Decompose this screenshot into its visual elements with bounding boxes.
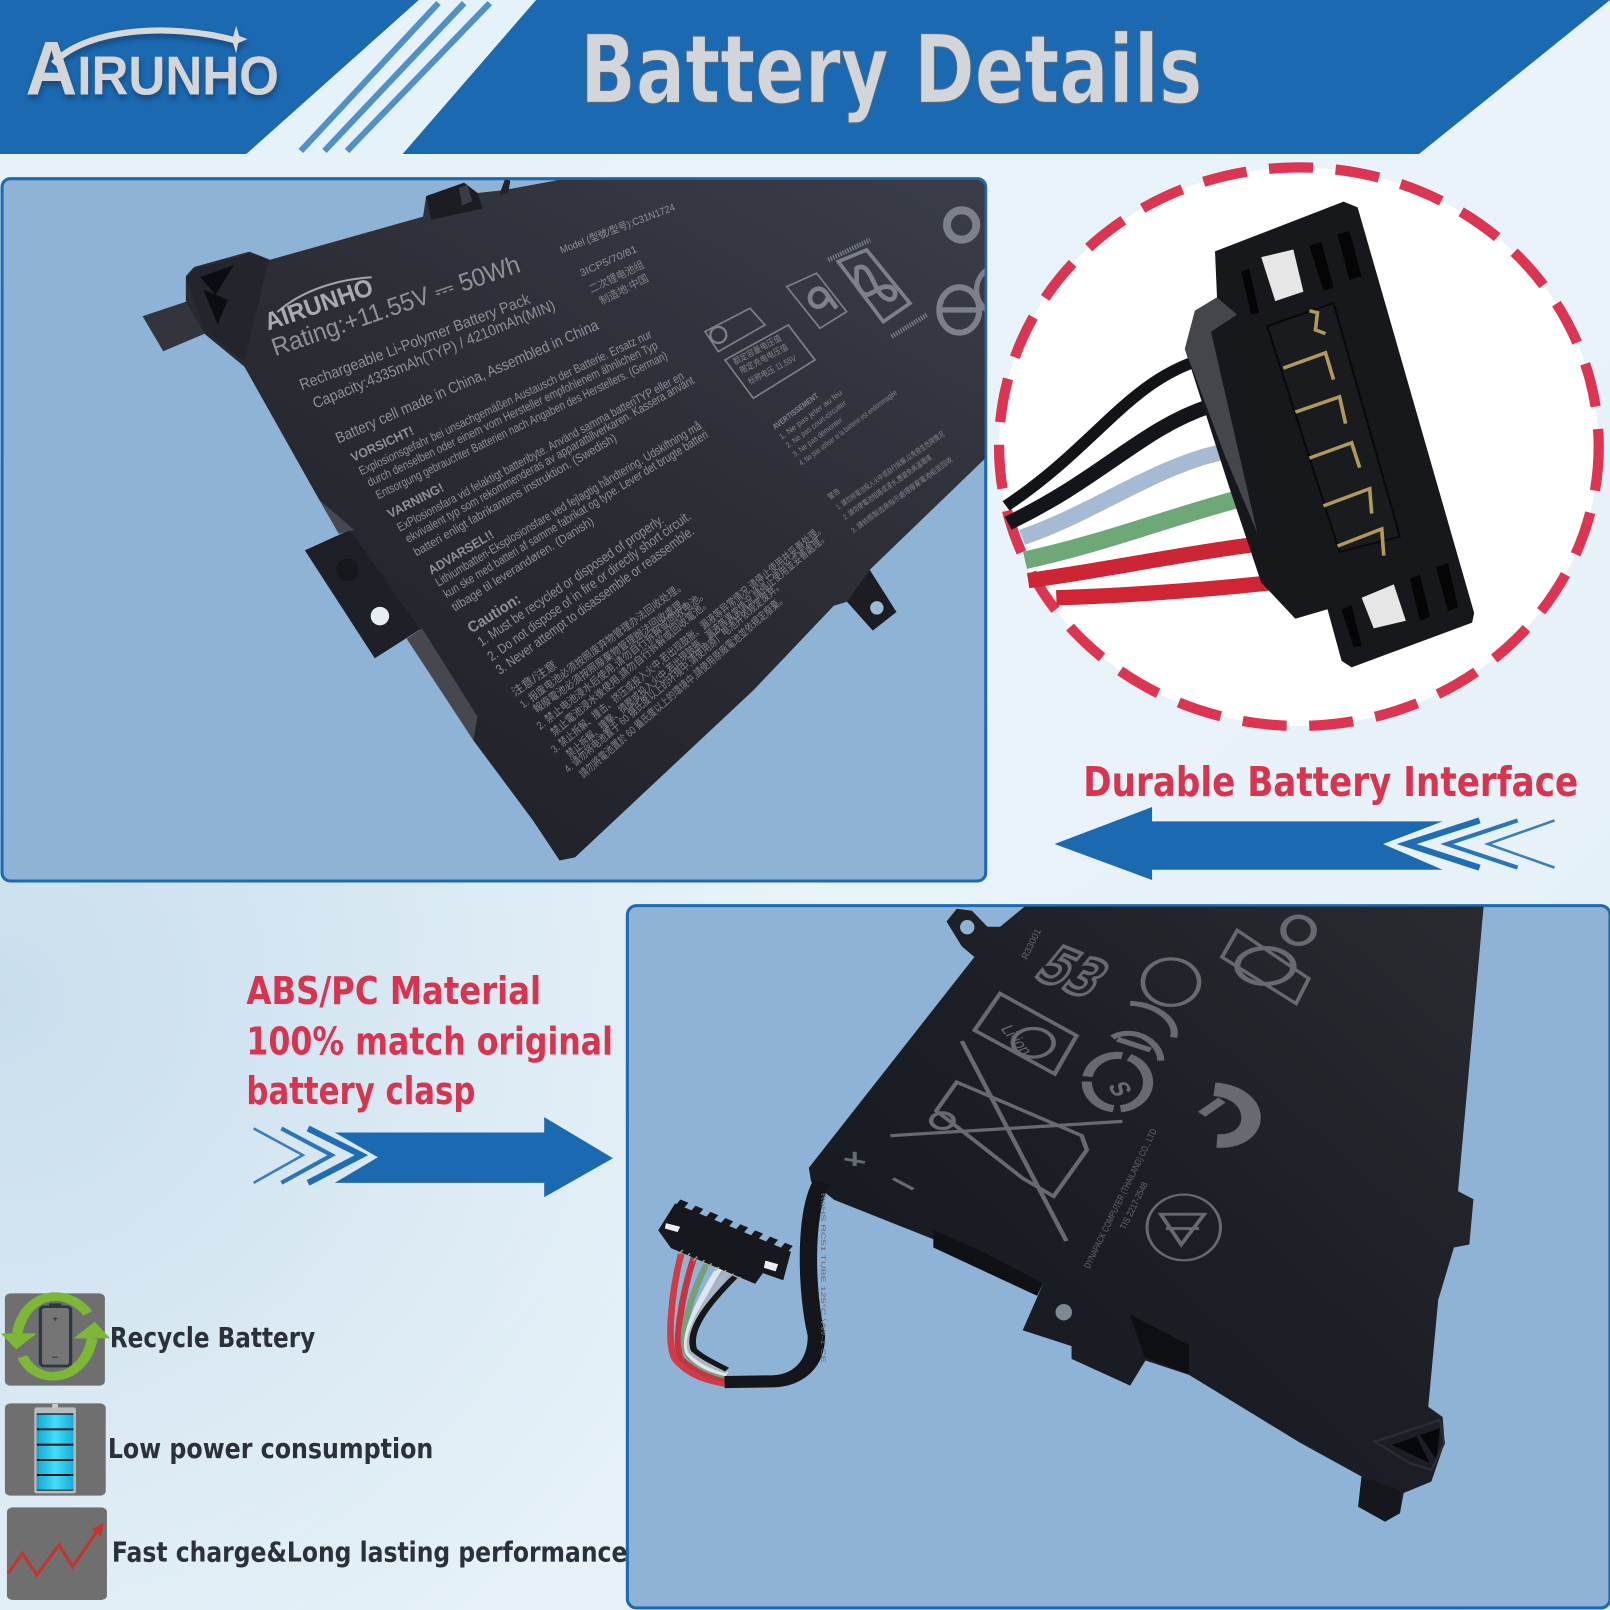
small warning text: 警告	[826, 486, 842, 502]
label text: ExPlosionsfara vid felaktigt batteribyte. Använd samma batteriTYP eller en	[395, 369, 686, 535]
recycle box: Li-ion	[996, 1023, 1036, 1057]
back label text	[1020, 927, 1159, 1270]
label text: Capacity:4335mAh(TYP) / 4210mAh(MIN)	[310, 297, 558, 412]
black sheath	[725, 1182, 822, 1382]
clasp details	[933, 920, 1189, 1374]
callout: ABS/PC material: ABS/PC Material	[246, 969, 541, 1013]
label text: VARNING!	[385, 480, 446, 521]
label text: 禁止拆解、撞擊、擠壓或投入火中,若出現鼓脹、漏液等異常情況,請停止使用並妥善處理。	[563, 530, 831, 761]
small warning text: 4. Ne pas utiliser si la batterie est endommagée	[797, 388, 899, 468]
back label text: DYNAPACK COMPUTER (THAILAND) CO., LTD	[1082, 1127, 1159, 1270]
battery cable: RoHS RC51 TUBE 125°C VW-1 CE	[819, 1193, 827, 1364]
title: Battery Details	[580, 16, 1202, 126]
label text: VORSICHT!	[348, 423, 416, 465]
label text: tilbage til leverandøren. (Danish)	[449, 514, 596, 614]
header banner	[0, 0, 1610, 154]
arrow: points left to connector	[1055, 807, 1555, 880]
label text: Entsorgung gebrauchter Batterien nach Angaben des Herstellers. (German)	[373, 349, 670, 502]
callout: ABS/PC material: 100% match original	[246, 1020, 613, 1064]
model block: 制造地:中国	[597, 272, 651, 308]
circle inset: connector close-up	[999, 167, 1599, 726]
battery body	[143, 179, 986, 860]
multi-colour wires	[671, 1254, 735, 1385]
label text: 1. Must be recycled or disposed of properly.	[474, 511, 666, 649]
back label text: TIS 2217-2548	[1118, 1180, 1150, 1231]
feature: recycle battery	[1, 1293, 315, 1386]
recycling circle	[1087, 1055, 1148, 1109]
logo on label: AIRUNHO	[261, 274, 377, 336]
label text: 2. Do not dispose of in fire or directly short circuit.	[484, 508, 694, 664]
feature: low power consumption	[5, 1403, 433, 1496]
logo: AIRUNHO	[26, 25, 279, 111]
model block	[558, 200, 677, 308]
model block: 二次锂电池组	[587, 258, 646, 296]
certification marks: 限定充电电压值	[737, 341, 790, 376]
small warning text: 2. 請勿使電池短路或浸水,應避免高溫環境	[841, 453, 933, 522]
label text: Explosionsgefahr bei unsachgemäßen Austausch der Batterie. Ersatz nur	[357, 327, 654, 478]
label: Recycle Battery	[110, 1323, 315, 1354]
label text: Battery cell made in China, Assembled in China	[333, 317, 602, 447]
icon: full battery	[5, 1403, 106, 1496]
small warning text: 1. Ne pas jeter au feu	[777, 388, 844, 442]
decorative white slash with lines	[246, 0, 536, 154]
callout: ABS/PC material: battery clasp	[246, 1069, 475, 1113]
label text: 注意/注意	[509, 658, 560, 699]
label text: kun ske med batteri af samme fabrikat og type. Lever det brugte batteri	[441, 428, 711, 601]
small warning text	[771, 388, 955, 535]
small warning text: 2. Ne pas court-circuiter	[784, 398, 848, 450]
panel: battery front label photo	[2, 179, 987, 881]
hook with hole	[847, 570, 896, 630]
label text: Caution:	[465, 591, 524, 637]
arrow: points right to clasp	[254, 1117, 613, 1197]
small warning text: 3. 請依照製造商指示處理廢棄電池組並回收	[849, 455, 955, 535]
label text: 2. 禁止电池浸水后使用,请勿自行拆解或回收电池。	[534, 587, 710, 732]
label text: 報廢電池必須按照廢棄物管理辦法回收處理。	[531, 593, 693, 716]
top right cert mark	[1222, 917, 1314, 1004]
label text	[261, 200, 987, 781]
label text: ekvivalent typ som rekommenderas av apparattillverkaren. Kassera använt	[403, 373, 697, 546]
model block: 3ICP5/70/81	[578, 244, 639, 279]
crossed bin	[890, 1041, 1123, 1241]
connector wires	[1006, 362, 1273, 598]
label text: 請勿將電池置於 60 攝氏度以上的環境中,請使用原廠電池並依規定廢棄。	[577, 592, 789, 781]
label text: 4. 请勿将电池置于 60 摄氏度以上的环境中,请使用原厂电池并依规定废弃。	[562, 578, 786, 775]
bottom corner clip	[1358, 1420, 1444, 1522]
panel: battery back photo	[627, 906, 1610, 1608]
battery body	[809, 906, 1484, 1522]
label text: 3. 禁止拆解、撞击、挤压或投入火中,若出现鼓胀、漏液等异常情况,请停止使用并妥善处理。	[549, 522, 827, 756]
label text: 1. 报废电池必须按照废弃物管理办法回收处理。	[517, 579, 688, 711]
feature: fast charge	[7, 1507, 627, 1600]
certification marks: 额定容量电压值	[731, 332, 783, 367]
corner clip	[143, 254, 269, 361]
connector gold pins	[1283, 311, 1384, 556]
top clip	[426, 179, 510, 220]
icon: recycle battery	[1, 1293, 110, 1386]
recycle box	[975, 994, 1077, 1074]
small warning text: 3. Ne pas démonter	[791, 415, 844, 459]
battery cable	[658, 1182, 827, 1385]
label text: 3. Never attempt to disassemble or reassemble.	[492, 523, 697, 677]
certification marks	[705, 210, 987, 398]
label text: durch denselben oder einem vom Hersteller empfohlenem ähnlichen Typ	[365, 338, 660, 489]
certification marks: 标称电压 11.55V	[746, 352, 798, 387]
icon: recycle battery: +	[52, 1315, 59, 1324]
model block: Model (型號/型号):C31N1724	[558, 200, 677, 256]
regulatory symbols	[844, 917, 1314, 1260]
back label text: R33001	[1020, 927, 1043, 961]
label text: Rating:+11.55V ⎓ 50Wh	[268, 251, 524, 362]
label text: Lithiumbatteri-Eksplosionsfare ved fejlagtig håndtering. Udskiftning må	[433, 419, 704, 589]
label text: 禁止電池浸水後使用,請勿自行拆解或回收電池。	[548, 596, 713, 739]
polarity marks	[844, 1152, 913, 1189]
triangle circle	[1147, 1195, 1220, 1260]
callout: ABS/PC material	[246, 969, 613, 1113]
small warning text: 1. 請勿將電池投入火中或自行拆解,以免發生危險情況	[834, 429, 946, 512]
small warning text: AVERTISSEMENT	[771, 391, 820, 432]
connector housing	[1185, 202, 1474, 667]
label text: ADVARSEL!!	[425, 527, 496, 578]
icon: rising chart	[7, 1507, 107, 1600]
recycling circle: S	[1101, 1078, 1137, 1100]
safety mark: 53	[1024, 936, 1122, 1010]
label: Fast charge&Long lasting performance	[112, 1538, 627, 1569]
RCM circle	[1143, 959, 1199, 1005]
wire connector	[658, 1204, 791, 1284]
label text: Rechargeable Li-Polymer Battery Pack	[297, 291, 533, 394]
icon: recycle battery: −	[52, 1353, 59, 1363]
PC mark	[1202, 1089, 1251, 1141]
label: Low power consumption	[108, 1434, 433, 1465]
label text: batteri enligt fabrikantens instruktion. (Swedish)	[411, 431, 619, 559]
side tab with hole	[305, 500, 477, 740]
